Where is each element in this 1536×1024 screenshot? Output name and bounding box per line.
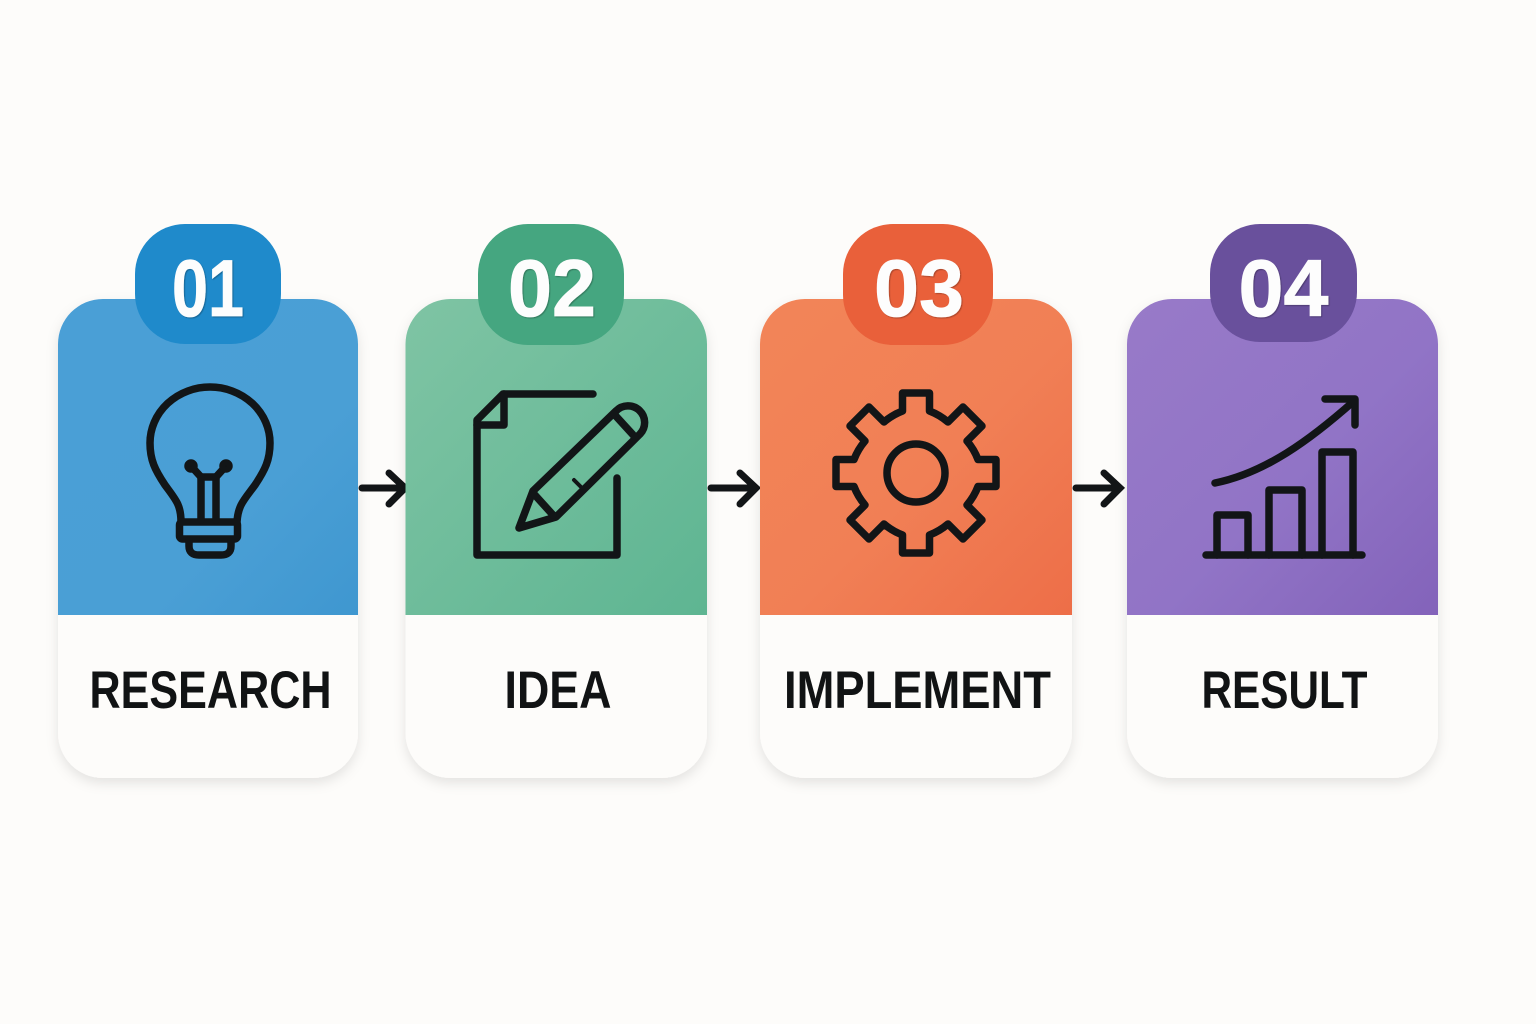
number badge: 04: 04 <box>1238 244 1328 334</box>
icon: rising bar chart <box>1206 399 1362 555</box>
arrow: research to idea <box>362 473 405 504</box>
number badge: 02: 02 <box>508 244 596 334</box>
colour panel: implement <box>760 299 1072 615</box>
label: implement: IMPLEMENT <box>784 661 1051 720</box>
number badge: 03: 03 <box>874 244 964 334</box>
label: result: RESULT <box>1202 661 1368 720</box>
panel: research <box>58 224 358 778</box>
icon: light bulb <box>150 387 270 555</box>
panel: idea <box>406 224 707 778</box>
label: idea: IDEA <box>504 661 612 720</box>
number badge: 01: 01 <box>172 244 244 334</box>
number badge: 01 <box>135 224 281 344</box>
icon: document and pencil <box>477 394 645 555</box>
card base: research <box>58 299 358 778</box>
number badge: 04 <box>1210 224 1357 342</box>
panel: implement <box>760 224 1072 778</box>
number badge: 02 <box>478 224 624 345</box>
icon: gear <box>836 393 996 553</box>
card base: idea <box>406 299 707 778</box>
colour panel: idea <box>406 299 707 615</box>
label: research: RESEARCH <box>90 661 332 720</box>
panel: result <box>1127 224 1438 778</box>
number badge: 03 <box>843 224 993 345</box>
colour panel: research <box>58 299 358 615</box>
colour panel: result <box>1127 299 1438 615</box>
arrow: idea to implement <box>711 473 756 504</box>
arrow: implement to result <box>1076 473 1120 504</box>
card base: result <box>1127 299 1438 778</box>
card base: implement <box>760 299 1072 778</box>
